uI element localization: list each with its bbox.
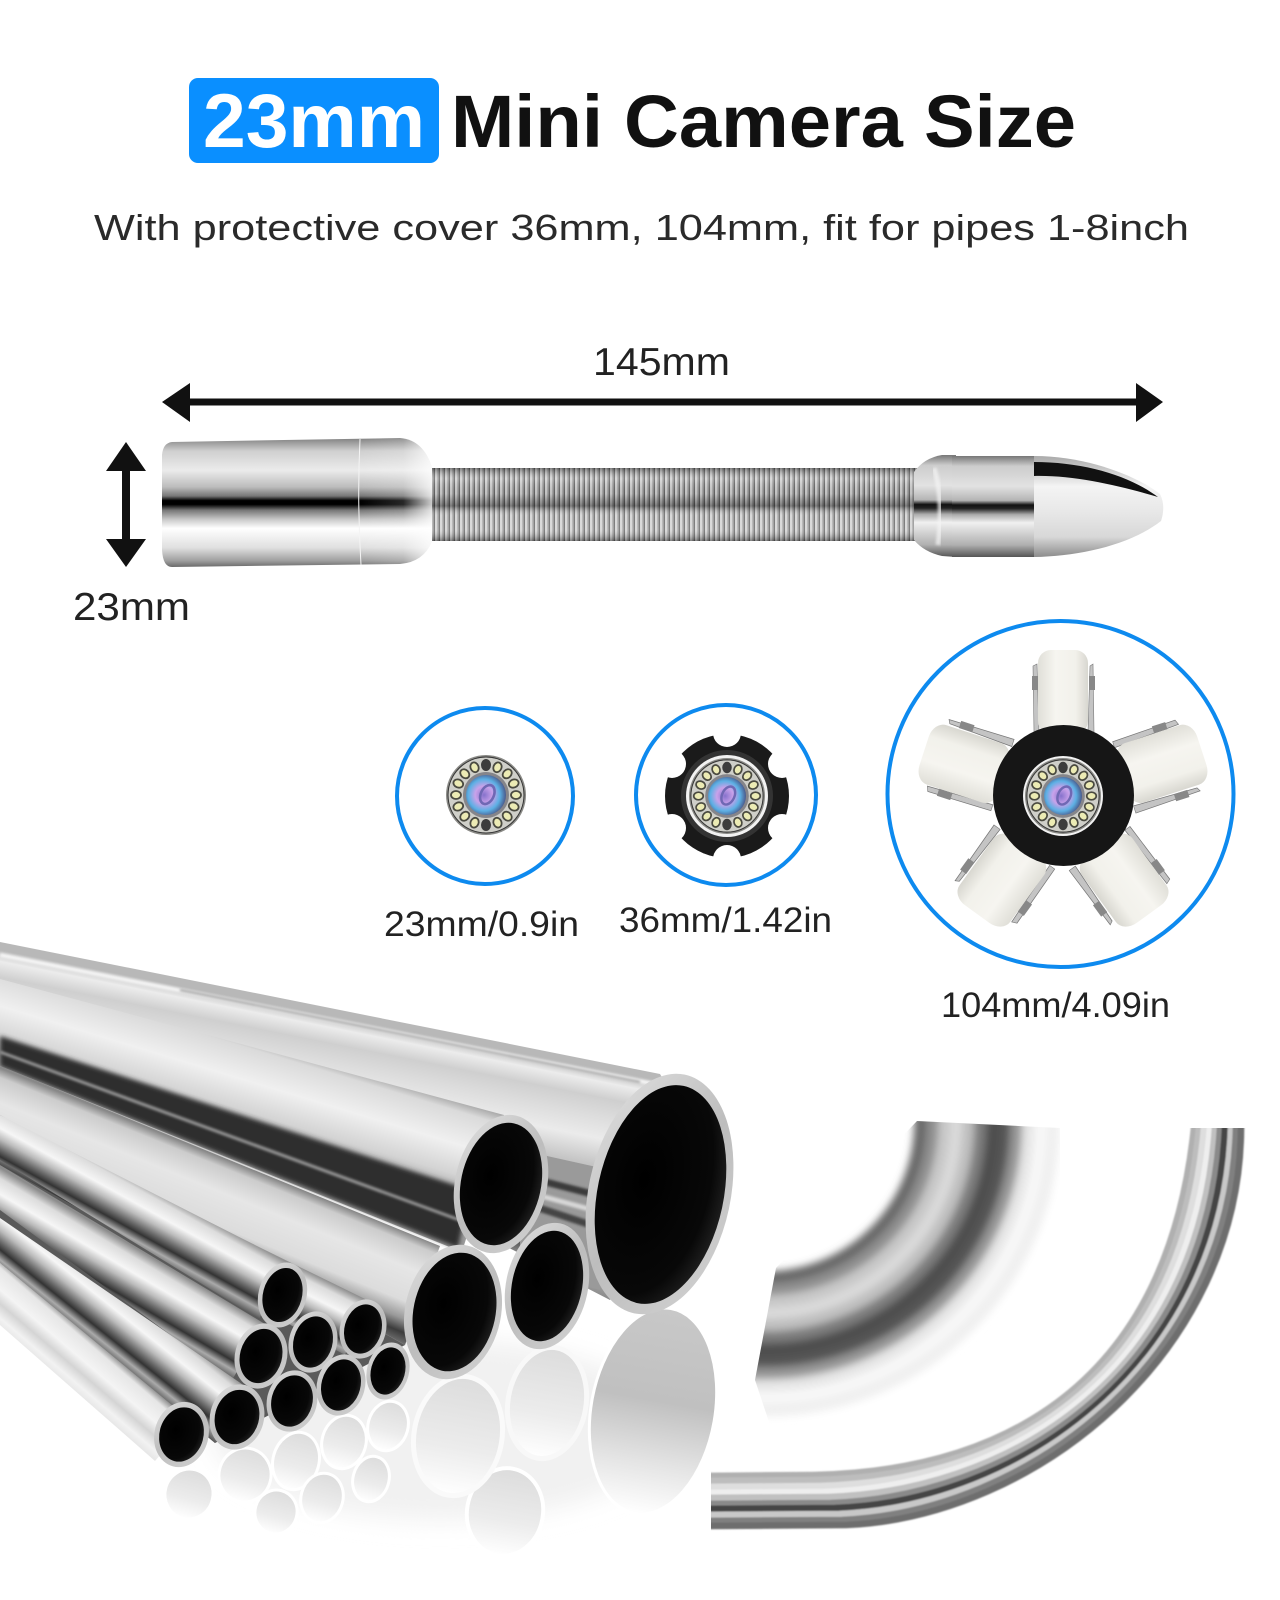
icon: black protective cover bbox=[658, 719, 796, 873]
thick pipe elbow bbox=[735, 1100, 1053, 1410]
camera probe bbox=[162, 438, 1163, 567]
slim bent pipe bbox=[700, 1110, 1241, 1526]
pipe end: medium left bbox=[392, 1236, 514, 1388]
pipe reflections bbox=[159, 1298, 732, 1562]
lens label: 36mm: 36mm/1.42in bbox=[619, 901, 832, 940]
lens label: 23mm: 23mm/0.9in bbox=[384, 905, 579, 944]
ball joint bbox=[914, 455, 956, 557]
lens circle: 23mm bbox=[397, 708, 573, 884]
lens label: 104mm: 104mm/4.09in bbox=[941, 986, 1170, 1025]
subtitle: With protective cover 36mm, 104mm, fit for pipes 1-8inch bbox=[94, 207, 1189, 248]
lens circle: 36mm bbox=[636, 705, 816, 885]
pipe end: medium right bbox=[494, 1215, 600, 1357]
camera head cylinder bbox=[162, 438, 432, 567]
spring neck bbox=[428, 468, 918, 541]
pipe end: largest bbox=[565, 1060, 754, 1328]
lens circle: 104mm bbox=[888, 621, 1234, 967]
arrow: diameter dimension bbox=[106, 442, 146, 567]
stainless steel pipe bundle bbox=[0, 942, 754, 1473]
heading badge: 23mm: 23mm bbox=[203, 79, 425, 164]
arrow: length dimension bbox=[162, 383, 1163, 422]
bullet tip bbox=[1034, 456, 1163, 557]
collar bbox=[952, 456, 1034, 557]
small pipe ends bbox=[147, 1257, 416, 1473]
dimension label: length: 145mm bbox=[593, 341, 730, 384]
pipe bodies bbox=[0, 942, 700, 1461]
icon: wheeled centering skid bbox=[912, 650, 1214, 938]
heading text: Mini Camera Size bbox=[451, 80, 1076, 163]
dimension label: diameter: 23mm bbox=[73, 586, 190, 629]
icon: bare camera lens bbox=[446, 755, 526, 835]
pipe end: medium top bbox=[441, 1106, 561, 1262]
